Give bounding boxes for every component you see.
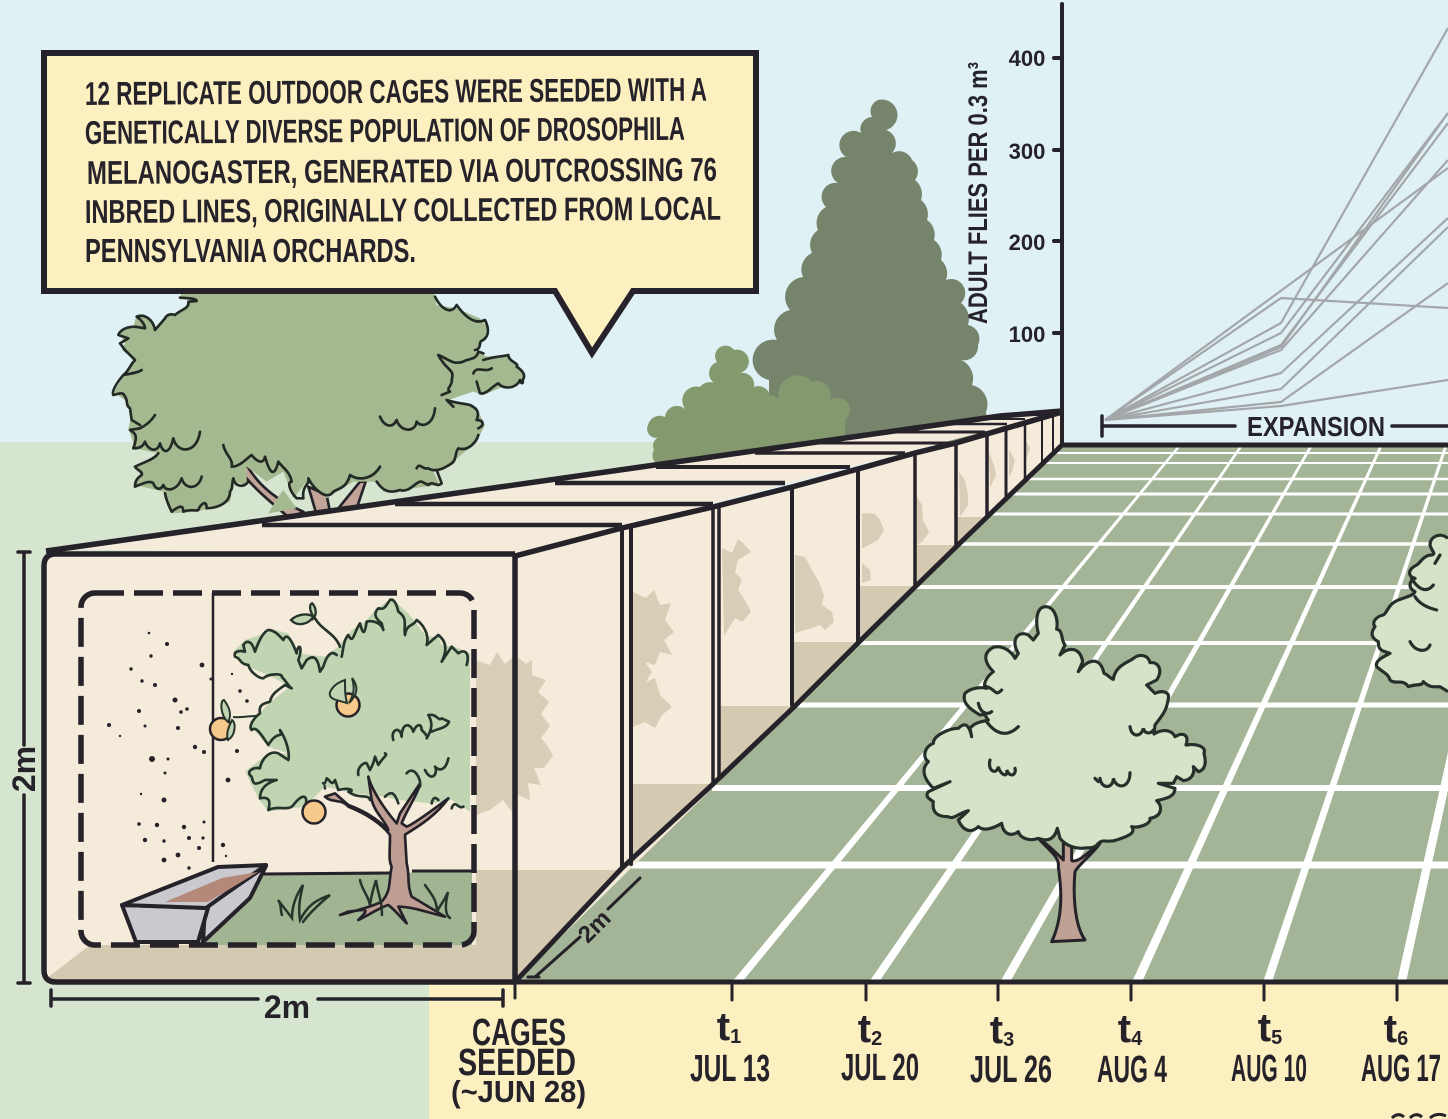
height label: 2m — [6, 746, 42, 792]
cage row side wall — [515, 412, 1062, 982]
cropped text fragment at bottom edge — [1392, 1114, 1446, 1118]
chart y axis — [963, 4, 1062, 445]
timepoint labels: t — [858, 1007, 871, 1051]
dashed inner frame — [81, 593, 474, 945]
timepoint labels: t — [990, 1008, 1003, 1052]
date labels: AUG 4 — [1097, 1049, 1167, 1091]
interior ground — [200, 872, 472, 945]
timepoint labels: t — [1384, 1007, 1397, 1051]
bracket label: EXPANSION — [1247, 411, 1385, 442]
background round tree — [113, 292, 524, 518]
date labels: JUL 13 — [690, 1048, 770, 1090]
trunk — [1038, 838, 1100, 942]
width dimension — [51, 989, 503, 1025]
timepoint labels: t — [717, 1005, 730, 1049]
tree outline strokes — [113, 297, 524, 512]
tick labels: 200 — [1009, 230, 1045, 255]
bubble box — [44, 53, 756, 353]
seeded label: SEEDED — [458, 1042, 576, 1084]
axis title: ADULT FLIES PER 0.3 m³ — [963, 62, 993, 324]
speech bubble callout — [44, 53, 756, 353]
height dimension — [6, 552, 42, 983]
flies — [107, 632, 249, 870]
bubble text: MELANOGASTER, GENERATED VIA OUTCROSSING 76 — [87, 151, 717, 191]
timepoint labels: 2 — [871, 1028, 882, 1050]
wall dividers — [515, 414, 1062, 982]
crown detail strokes — [978, 687, 1153, 786]
partial crown — [1372, 535, 1448, 692]
floor grid — [515, 445, 1448, 982]
seeded label: (~JUN 28) — [451, 1074, 586, 1109]
small leaves — [291, 603, 316, 624]
crown — [233, 598, 470, 812]
tick labels: 400 — [1009, 46, 1045, 71]
seeded label — [451, 1012, 586, 1109]
interior pole — [212, 593, 214, 862]
foreground tree right — [924, 607, 1205, 942]
ground back edge — [262, 871, 472, 874]
timepoint labels: 1 — [730, 1026, 741, 1048]
tree shadows on walls — [633, 440, 1030, 728]
timepoint labels: 3 — [1003, 1029, 1014, 1051]
axis line and ticks — [1054, 4, 1062, 445]
small crown piece under trunk — [268, 490, 297, 513]
bubble text: GENETICALLY DIVERSE POPULATION OF DROSOPHILA — [85, 110, 685, 151]
side wall — [515, 412, 1062, 982]
radial grid lines — [732, 447, 1448, 982]
tree crown — [113, 292, 523, 513]
cross grid lines — [622, 453, 1448, 865]
date labels: AUG 10 — [1231, 1048, 1307, 1090]
axis line and ticks — [515, 980, 1448, 984]
population line chart — [1105, 28, 1448, 420]
date labels — [690, 1047, 1441, 1091]
ground background — [0, 442, 700, 1119]
trunk and branches — [325, 777, 448, 923]
floor area — [515, 445, 1448, 982]
crown — [924, 607, 1205, 848]
timepoint labels: 6 — [1397, 1028, 1408, 1050]
expansion bracket — [1102, 411, 1448, 442]
depth label: 2m — [573, 905, 617, 949]
tick labels: 300 — [1009, 139, 1045, 164]
trough side — [203, 866, 266, 942]
cage outline — [44, 554, 515, 982]
background pine tree — [753, 99, 990, 445]
top face — [44, 411, 1062, 556]
front cage panel — [44, 554, 553, 982]
timepoint labels — [717, 1005, 1408, 1052]
cage face — [44, 554, 515, 982]
timepoint labels: t — [1258, 1006, 1271, 1050]
timepoint labels: 4 — [1131, 1028, 1143, 1050]
width label: 2m — [264, 989, 310, 1025]
top edges — [46, 411, 1062, 556]
trough front — [122, 905, 208, 942]
food trough — [122, 865, 266, 942]
wall floor shading — [515, 517, 987, 982]
grass tufts — [278, 880, 450, 922]
tick labels: 100 — [1009, 322, 1045, 347]
height dimension line — [18, 552, 30, 983]
bubble text: INBRED LINES, ORIGINALLY COLLECTED FROM LOCAL — [85, 190, 721, 230]
seeded label: CAGES — [472, 1012, 566, 1054]
tree trunks — [242, 382, 477, 518]
timepoint labels: 5 — [1271, 1027, 1282, 1049]
foreground tree edge — [1372, 535, 1448, 692]
chart horizontal axis — [1062, 442, 1448, 448]
crown outline strokes — [235, 600, 468, 810]
bubble text: PENNSYLVANIA ORCHARDS. — [85, 232, 416, 269]
top cross lines — [262, 415, 1040, 525]
date labels: JUL 20 — [841, 1047, 919, 1089]
cage floor shade — [47, 870, 515, 982]
fruit tree in cage — [233, 598, 470, 923]
date labels: JUL 26 — [970, 1049, 1052, 1091]
cage row top face — [44, 411, 1062, 556]
fruit leaves — [221, 678, 356, 740]
depth dimension — [528, 878, 640, 977]
background small conifer — [647, 346, 850, 465]
tick labels — [1009, 46, 1045, 347]
orange fruits — [336, 694, 360, 716]
timeline axis — [451, 982, 1448, 1109]
timeline band — [429, 984, 1448, 1119]
bubble text — [85, 71, 721, 269]
timepoint labels: t — [1118, 1007, 1131, 1051]
bubble text: 12 REPLICATE OUTDOOR CAGES WERE SEEDED WITH A — [85, 71, 707, 112]
trough dirt — [165, 872, 258, 902]
width dimension line — [51, 990, 503, 1006]
depth dimension line — [528, 878, 640, 977]
partial crown details — [1410, 555, 1440, 650]
trough rim — [122, 865, 266, 908]
tree shadow behind cage — [476, 652, 553, 815]
bracket line — [1102, 416, 1448, 436]
